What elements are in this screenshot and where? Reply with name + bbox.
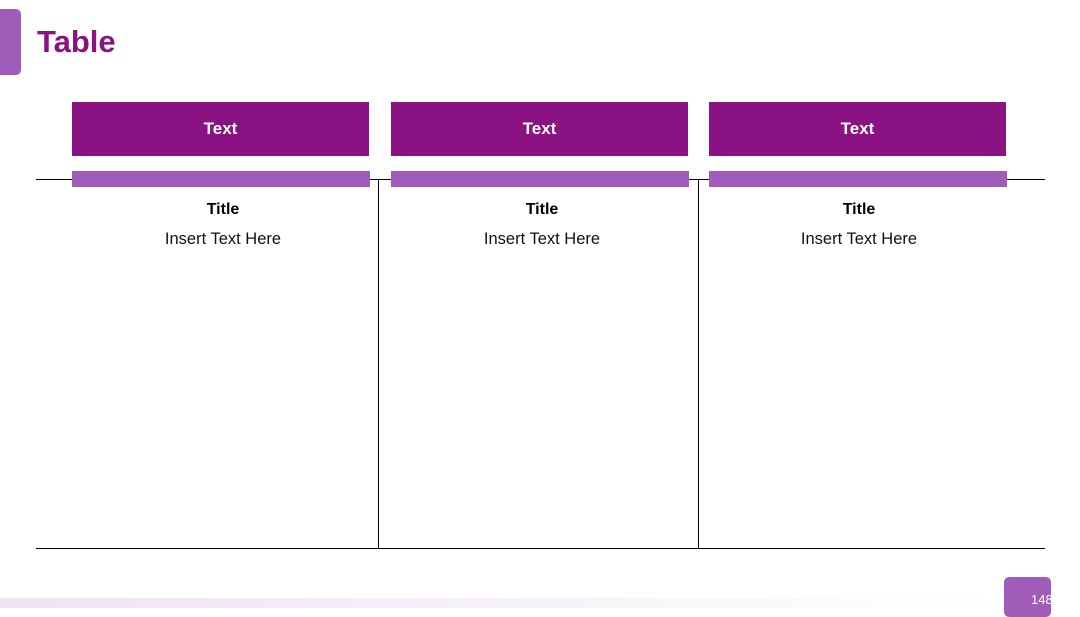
- header 2: [391, 102, 688, 156]
- column 3 text: Insert Text Here: [801, 230, 917, 248]
- bar 3: [709, 171, 1007, 187]
- column 1 text: Title: [207, 201, 239, 218]
- header 3: Text: [841, 119, 874, 138]
- tab accent: [0, 9, 21, 75]
- column 2 text: Insert Text Here: [484, 230, 600, 248]
- column 2 text: [484, 201, 600, 248]
- bar 2: [391, 171, 689, 187]
- title: Table: [37, 24, 116, 59]
- footer gradient: [0, 598, 1000, 608]
- bar 1: [72, 171, 370, 187]
- header 1: [72, 102, 369, 156]
- header 1: Text: [204, 119, 237, 138]
- header 2: Text: [523, 119, 556, 138]
- column 3 text: Title: [843, 201, 875, 218]
- column 2 text: Title: [526, 201, 558, 218]
- column 3 text: [801, 201, 917, 248]
- column 1 text: [165, 201, 281, 248]
- page number: [1004, 577, 1051, 617]
- header 3: [709, 102, 1006, 156]
- column 1 text: Insert Text Here: [165, 230, 281, 248]
